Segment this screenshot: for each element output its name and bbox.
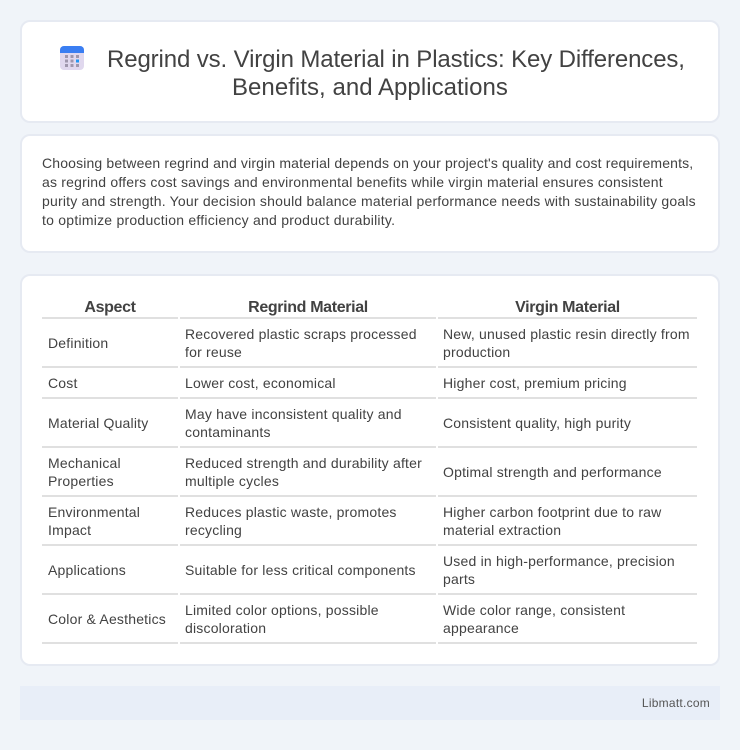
row: color and aesthetics: Color & Aesthetics xyxy=(48,610,166,626)
row: environmental impact xyxy=(42,504,697,546)
row: color and aesthetics: Limited color options, possible xyxy=(185,602,379,618)
row: environmental impact: material extraction xyxy=(443,522,561,538)
row: definition: Definition xyxy=(48,334,108,350)
title xyxy=(107,46,685,101)
row: definition: New, unused plastic resin directly from xyxy=(443,326,690,342)
footer bar xyxy=(20,686,720,720)
row: definition xyxy=(42,326,697,368)
title: Benefits, and Applications xyxy=(232,74,508,101)
row: color and aesthetics: Wide color range, consistent xyxy=(443,602,625,618)
row: applications: Suitable for less critical components xyxy=(185,562,416,578)
row: material quality: contaminants xyxy=(185,424,271,440)
row: material quality: May have inconsistent quality and xyxy=(185,406,402,422)
table header: Regrind Material xyxy=(248,299,368,316)
row: applications xyxy=(42,552,697,595)
row: applications: parts xyxy=(443,570,475,586)
title: Regrind vs. Virgin Material in Plastics: Key Differences, xyxy=(107,46,685,73)
comparison table panel xyxy=(20,274,720,666)
intro paragraph: purity and strength. Your decision should balance material performance needs with sustainability goals xyxy=(42,193,696,209)
row: definition: Recovered plastic scraps processed xyxy=(185,326,417,342)
intro paragraph: as regrind offers cost savings and environmental benefits while virgin material ensures consistent xyxy=(42,174,663,190)
row: mechanical properties: Reduced strength and durability after xyxy=(185,454,422,470)
row: mechanical properties: Properties xyxy=(48,472,114,488)
row: mechanical properties: multiple cycles xyxy=(185,472,279,488)
row: color and aesthetics: appearance xyxy=(443,620,519,636)
comparison table xyxy=(42,299,697,644)
row: cost xyxy=(42,374,697,399)
intro paragraph: Choosing between regrind and virgin material depends on your project's quality and cost requirements, xyxy=(42,155,693,171)
header card xyxy=(20,20,720,123)
intro paragraph xyxy=(42,155,696,228)
row: mechanical properties: Optimal strength and performance xyxy=(443,464,662,480)
row: environmental impact: Reduces plastic waste, promotes xyxy=(185,504,397,520)
intro paragraph: to optimize production efficiency and product durability. xyxy=(42,212,395,228)
row: material quality xyxy=(42,406,697,448)
row: applications: Applications xyxy=(48,562,126,578)
row: environmental impact: Impact xyxy=(48,522,91,538)
row: color and aesthetics: discoloration xyxy=(185,620,266,636)
table header xyxy=(42,299,697,644)
row: cost: Lower cost, economical xyxy=(185,374,336,390)
row: applications: Used in high-performance, precision xyxy=(443,552,675,568)
intro text panel xyxy=(20,134,720,253)
table header: Aspect xyxy=(84,299,136,316)
row: definition: for reuse xyxy=(185,344,242,360)
row: mechanical properties: Mechanical xyxy=(48,454,121,470)
row: mechanical properties xyxy=(42,454,697,497)
row: environmental impact: recycling xyxy=(185,522,242,538)
row: environmental impact: Environmental xyxy=(48,504,140,520)
icon: calendar grid xyxy=(60,46,84,70)
row: color and aesthetics xyxy=(42,602,697,644)
row: material quality: Consistent quality, high purity xyxy=(443,414,631,430)
row: environmental impact: Higher carbon footprint due to raw xyxy=(443,504,661,520)
table header: Virgin Material xyxy=(515,299,620,316)
row: cost: Cost xyxy=(48,374,78,390)
row: material quality: Material Quality xyxy=(48,414,148,430)
footer credit: Libmatt.com xyxy=(642,696,710,710)
row: cost: Higher cost, premium pricing xyxy=(443,374,627,390)
row: definition: production xyxy=(443,344,510,360)
